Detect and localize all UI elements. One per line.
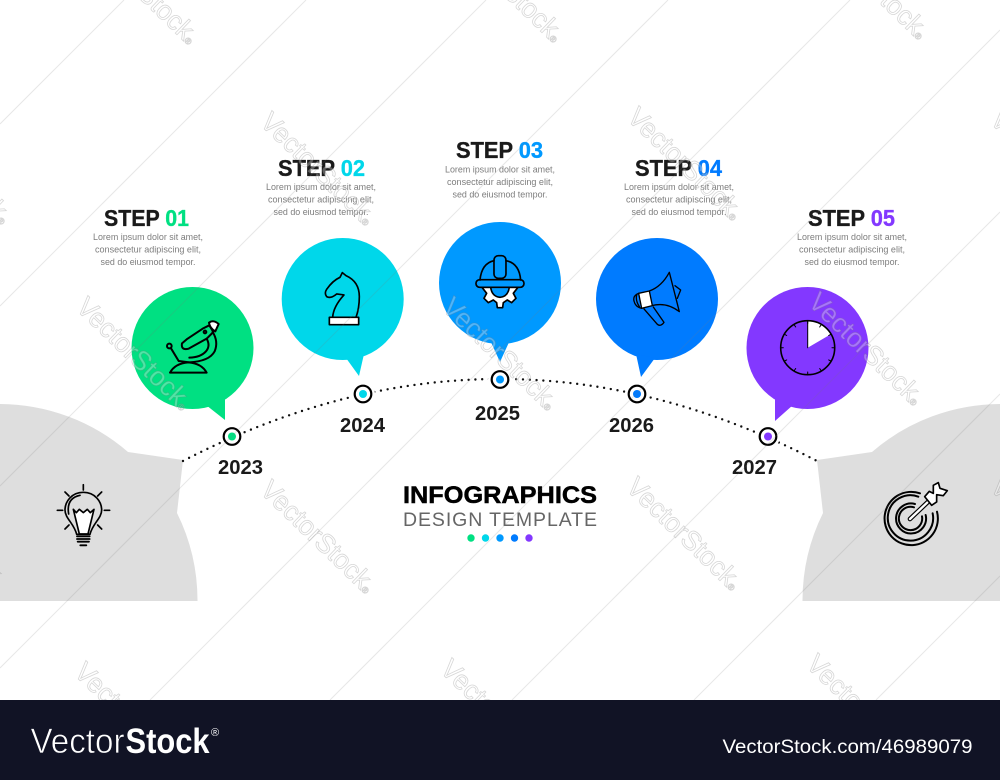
watermark text: VectorStock®: [437, 292, 564, 416]
step 4 text: Lorem ipsum dolor sit amet,: [624, 182, 734, 192]
icon: target with arrow: [885, 483, 947, 545]
step 5 text: consectetur adipiscing elit,: [799, 244, 905, 254]
step 3 group: [439, 137, 561, 362]
step 1 text: sed do eiusmod tempor.: [100, 257, 196, 267]
step 3 heading: STEP 03: [456, 137, 543, 163]
icon: megaphone: [634, 272, 681, 325]
step 2 text: [266, 182, 376, 217]
step 5 group: [746, 205, 907, 421]
step 5 text: Lorem ipsum dolor sit amet,: [797, 232, 907, 242]
step 4 text: [624, 182, 734, 217]
dotted timeline arc: [183, 379, 817, 461]
footer logo: Vector: [30, 722, 125, 761]
step 3 text: Lorem ipsum dolor sit amet,: [445, 164, 555, 174]
watermark text: VectorStock®: [622, 102, 749, 226]
watermark text: VectorStock®: [803, 287, 930, 411]
step 4 text: sed do eiusmod tempor.: [632, 207, 726, 217]
footer logo: ®: [211, 727, 219, 739]
step 5 speech bubble: [746, 287, 868, 421]
step 2 group: [266, 155, 404, 376]
step 1 text: Lorem ipsum dolor sit amet,: [93, 232, 203, 242]
step 1 group: [93, 205, 254, 420]
colour dots: [467, 534, 533, 542]
watermark text: VectorStock®: [801, 649, 928, 773]
year labels: 2023: [218, 457, 263, 479]
step 3 text: consectetur adipiscing elit,: [447, 177, 553, 187]
icon: light bulb: [57, 485, 110, 545]
footer image id: VectorStock.com/46989079: [722, 736, 972, 758]
subtitle: DESIGN TEMPLATE: [403, 509, 597, 531]
step 1 text: [93, 232, 203, 267]
footer logo: Stock: [126, 722, 210, 761]
watermark text: VectorStock®: [71, 292, 198, 416]
timeline node 2027: [756, 424, 780, 448]
step 4 speech bubble: [596, 238, 718, 377]
icon: microscope: [167, 321, 219, 373]
right grey hill: [802, 404, 1000, 601]
year labels: 2025: [475, 403, 520, 425]
year labels: [218, 403, 777, 479]
year labels: 2027: [732, 457, 777, 479]
icon: helmet with gear: [476, 256, 524, 308]
step 3 speech bubble: [439, 222, 561, 362]
step 3 text: [445, 164, 555, 200]
step 3 text: sed do eiusmod tempor.: [452, 190, 548, 200]
step 2 text: consectetur adipiscing elit,: [268, 194, 374, 204]
footer logo: [30, 722, 219, 761]
step 1 speech bubble: [132, 287, 254, 420]
watermark text: VectorStock®: [255, 107, 382, 231]
step 1 text: consectetur adipiscing elit,: [95, 244, 201, 254]
footer bar: [0, 700, 1000, 780]
timeline node 2025: [488, 368, 512, 392]
step 2 text: Lorem ipsum dolor sit amet,: [266, 182, 376, 192]
step 2 text: sed do eiusmod tempor.: [274, 207, 368, 217]
timeline node 2026: [625, 382, 649, 406]
timeline node 2024: [351, 382, 375, 406]
year labels: 2024: [340, 415, 386, 437]
watermark text: VectorStock®: [621, 472, 748, 596]
watermark text: VectorStock®: [255, 475, 382, 599]
timeline node 2023: [220, 424, 244, 448]
icon: chess knight: [325, 273, 359, 325]
title: INFOGRAPHICS: [403, 482, 597, 509]
watermark text: VectorStock®: [69, 657, 196, 780]
step 4 text: consectetur adipiscing elit,: [626, 194, 732, 204]
icon: clock: [781, 321, 835, 375]
step 4 group: [596, 155, 734, 377]
step 5 heading: STEP 05: [808, 205, 895, 231]
step 2 heading: STEP 02: [278, 155, 365, 181]
watermark text: VectorStock®: [435, 654, 562, 778]
step 5 text: sed do eiusmod tempor.: [804, 257, 900, 267]
step 1 heading: STEP 01: [104, 205, 189, 231]
step 4 heading: STEP 04: [635, 155, 722, 181]
step 2 speech bubble: [282, 238, 404, 376]
year labels: 2026: [609, 415, 654, 437]
step 5 text: [797, 232, 907, 267]
title: [403, 482, 597, 531]
left grey hill: [0, 404, 198, 601]
